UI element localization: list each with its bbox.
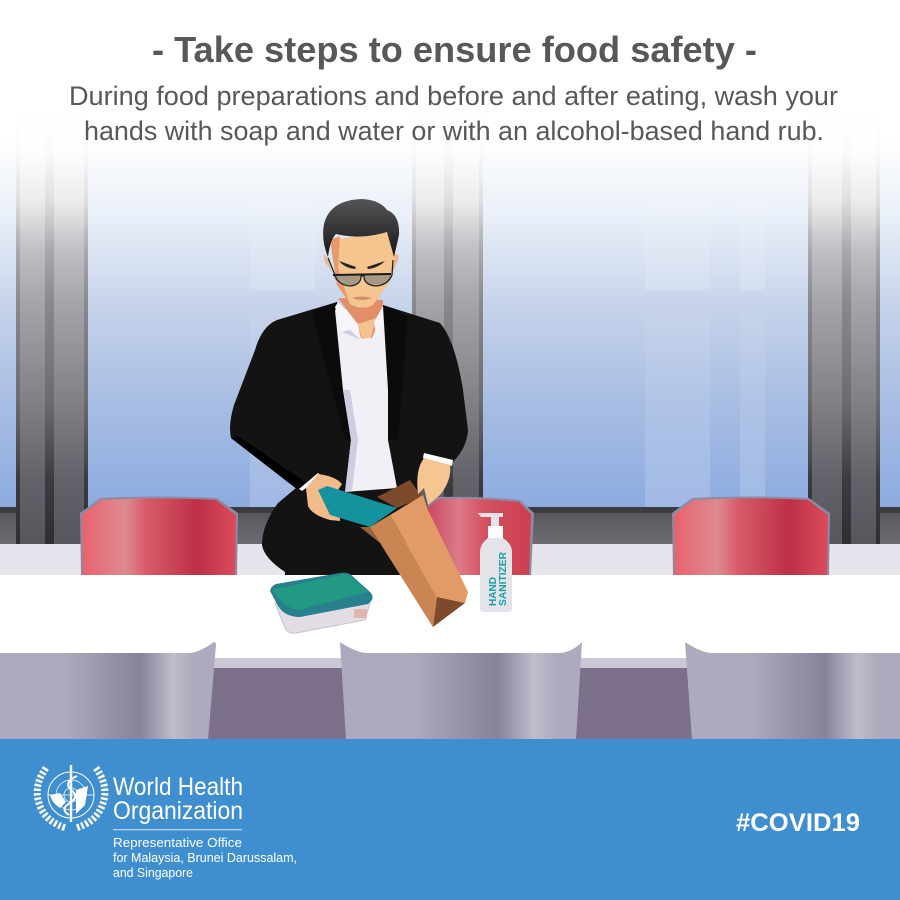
table top <box>0 575 900 660</box>
subtitle: During food preparations and before and after eating, wash your <box>69 81 838 111</box>
back chair right <box>672 496 830 575</box>
bag left side <box>360 527 433 627</box>
man: face <box>330 232 395 308</box>
subtitle: hands with soap and water or with an alcohol-based hand rub. <box>84 116 824 146</box>
man: right cuff <box>423 453 453 466</box>
man: eyebrows <box>339 261 385 269</box>
pillars <box>16 110 880 545</box>
subtitle <box>69 81 838 146</box>
man: right hand <box>417 458 450 505</box>
hand sanitizer <box>478 513 512 612</box>
front chair centre <box>340 642 582 740</box>
front chair left <box>0 642 216 740</box>
WHO emblem <box>37 765 105 828</box>
footer band <box>0 739 900 900</box>
man: left hand <box>306 474 342 521</box>
sanitizer label: HAND <box>487 577 499 606</box>
WHO wordmark: World Health <box>113 773 243 801</box>
bag opening <box>377 480 423 508</box>
man: neck <box>338 298 383 338</box>
bag bottom <box>433 597 465 627</box>
back chair left <box>80 496 238 575</box>
man: shirt <box>335 306 397 492</box>
background: office windows <box>0 0 900 576</box>
front chair right <box>685 642 900 740</box>
bag right panel <box>390 495 468 603</box>
paper bag <box>318 480 468 627</box>
bag front panel <box>370 515 437 627</box>
WHO wordmark: Representative Office <box>113 835 242 850</box>
sanitizer label: SANITIZER <box>497 552 509 606</box>
lunchbox lid in hand <box>318 486 397 527</box>
WHO wordmark <box>113 773 297 880</box>
man: hair <box>323 199 399 257</box>
sanitizer label <box>487 552 509 606</box>
food container <box>270 573 373 633</box>
man: mouth <box>352 296 372 300</box>
WHO wordmark: Organization <box>113 797 243 825</box>
man: jacket and body <box>230 302 468 576</box>
WHO wordmark: and Singapore <box>113 865 193 880</box>
man: glasses <box>328 258 393 286</box>
man: collar <box>335 302 383 340</box>
under table <box>205 658 900 740</box>
man: left cuff <box>299 473 322 491</box>
man: ears <box>324 255 332 272</box>
man <box>230 199 468 576</box>
title: - Take steps to ensure food safety - <box>152 29 757 70</box>
hashtag: #COVID19 <box>736 809 860 837</box>
WHO wordmark: for Malaysia, Brunei Darussalam, <box>113 850 297 865</box>
back chair centre <box>428 497 534 575</box>
